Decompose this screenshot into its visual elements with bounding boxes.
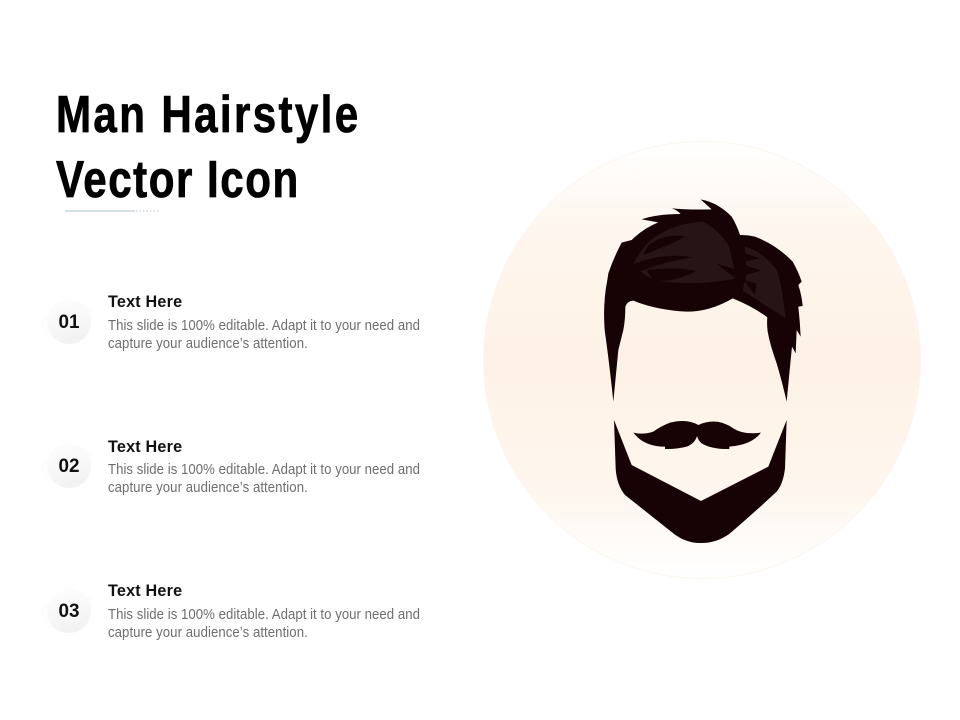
description 01: capture your audience’s attention. — [108, 334, 308, 351]
description 03: This slide is 100% editable. Adapt it to your need and — [108, 605, 420, 622]
description 02 — [108, 460, 420, 495]
item 02 — [40, 437, 420, 495]
heading 01: Text Here — [108, 292, 182, 311]
title: Vector Icon — [56, 151, 298, 209]
heading 03: Text Here — [108, 581, 182, 600]
description 02: capture your audience’s attention. — [108, 478, 308, 495]
icon: beard — [614, 420, 787, 543]
item 03 — [40, 581, 420, 640]
badge 03 — [40, 586, 92, 633]
description 01: This slide is 100% editable. Adapt it to your need and — [108, 316, 420, 333]
description 01 — [108, 316, 420, 351]
title: Man Hairstyle — [56, 86, 358, 144]
description 03: capture your audience’s attention. — [108, 623, 308, 640]
background circle — [484, 142, 920, 578]
icon: moustache — [633, 421, 761, 449]
badge 01 — [40, 298, 92, 344]
badge 02 — [40, 442, 92, 488]
description 02: This slide is 100% editable. Adapt it to your need and — [108, 460, 420, 477]
badge 02: 02 — [58, 456, 80, 477]
hair streaks — [633, 221, 761, 295]
title — [56, 86, 358, 209]
badge 01: 01 — [58, 312, 80, 333]
description 03 — [108, 605, 420, 640]
icon: man face with hair, moustache and beard — [604, 199, 803, 543]
heading 02: Text Here — [108, 437, 182, 456]
icon: moustache and beard — [614, 420, 787, 543]
title underline — [65, 210, 160, 212]
item 01 — [40, 292, 420, 351]
badge 03: 03 — [58, 601, 80, 622]
icon: hair — [604, 199, 803, 402]
